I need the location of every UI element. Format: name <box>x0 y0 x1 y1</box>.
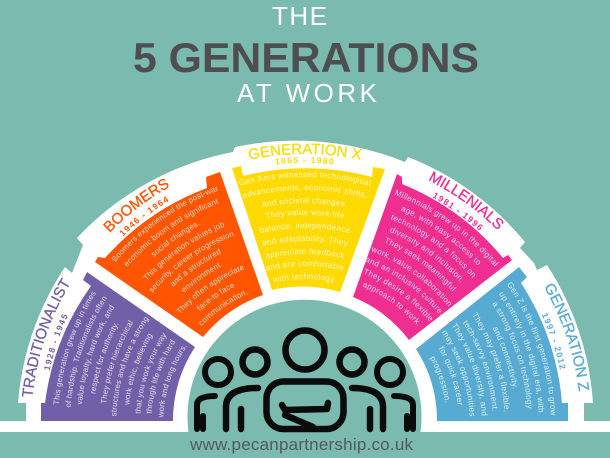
icon: inner right person <box>340 350 383 429</box>
title line: the: THE <box>272 1 327 31</box>
website footer: www.pecanpartnership.co.uk <box>189 435 414 454</box>
generation x heading and text: and societal changes. <box>262 197 346 207</box>
millenials heading and text: MILLENIALS <box>428 171 504 229</box>
generation x heading and text: 1965 - 1980 <box>275 157 334 165</box>
millenials heading and text: and an inclusive culture. <box>362 250 450 319</box>
millenials heading and text: work, value collaboration <box>367 239 458 310</box>
traditionalist heading and text <box>22 278 187 418</box>
boomers heading: 1946 - 1964 <box>120 196 168 236</box>
traditionalist heading and text: This generation grew up in times <box>53 292 96 404</box>
generation z heading and text: may seek opportunities <box>439 326 483 419</box>
boomers text: social changes. <box>152 223 200 256</box>
traditionalist heading and text: TRADITIONALIST <box>22 278 70 397</box>
millenials heading and text <box>362 171 504 326</box>
generation z heading and text: up entirely in the digital era, with <box>496 287 554 415</box>
generation x heading and text: GENERATION X <box>248 144 362 160</box>
generation x heading and text: and are comfortable <box>266 260 344 270</box>
millenials heading and text: age, with easy access to <box>401 207 480 265</box>
title <box>133 1 479 108</box>
boomers wedge <box>95 172 263 337</box>
traditionalist heading and text: work and long hours. <box>159 346 187 418</box>
boomers text: Boomers experienced the post-war <box>112 186 218 262</box>
traditionalist heading and text: of hardship. Traditionalists often <box>66 296 107 408</box>
millenials wedge <box>353 174 512 340</box>
panel: millenials <box>353 171 512 340</box>
millenials heading and text: They seek meaningful <box>382 232 461 294</box>
generation x heading and text: Gen Xers witnessed technological <box>239 171 372 186</box>
generation x heading and text: appreciate feedback <box>266 248 345 259</box>
generation x heading and text <box>239 144 372 283</box>
generation x heading and text: balance, independence <box>259 222 350 233</box>
generation z heading and text: progression. <box>428 354 454 405</box>
boomers text: This generation values job <box>143 222 224 280</box>
millenials heading and text: diversity and inclusion. <box>387 221 469 286</box>
icon: outer left person <box>197 359 231 429</box>
generation x heading and text: and adaptability. They <box>262 235 348 247</box>
millenials heading and text: They desire a flexible <box>360 263 439 325</box>
traditionalist heading and text: They prefer hierarchical <box>100 320 134 404</box>
traditionalist heading and text: 1928 - 1945 <box>44 314 68 370</box>
generation z heading and text: They may prefer a flexible, <box>470 309 518 415</box>
icon: group of five people <box>197 330 413 429</box>
boomers text: and a structured <box>171 248 221 286</box>
generation z heading and text <box>428 282 590 416</box>
icon: inner left person <box>226 350 268 429</box>
generation z heading and text: 1997 - 2012 <box>539 311 570 372</box>
boomers text: face-to face <box>196 284 234 311</box>
panel: generation x <box>232 144 385 292</box>
boomers text: economic boom and significant <box>124 198 219 266</box>
panel: boomers <box>95 172 263 337</box>
title line: at work: AT WORK <box>237 78 378 108</box>
traditionalist heading and text: through life with hard <box>146 339 176 414</box>
white semicircular backing with label bands <box>0 141 610 432</box>
generation z heading and text: and connectivity. <box>490 324 522 391</box>
millenials heading and text: approach to work. <box>360 276 426 329</box>
boomers text: communication. <box>199 292 248 326</box>
boomers text <box>112 186 248 326</box>
boomers text: security, career progression <box>150 232 234 292</box>
generation z heading and text: GENERATION Z <box>539 279 597 395</box>
traditionalist wedge <box>41 272 195 421</box>
generation x heading and text: advancements, economic shifts, <box>242 185 366 199</box>
traditionalist heading and text: value loyalty, hard work, and <box>77 304 114 404</box>
panel: traditionalist <box>22 272 195 421</box>
generation z heading and text: for quick career <box>436 344 468 408</box>
generation z heading and text: a strong focus on technology <box>490 298 542 412</box>
boomers heading: BOOMERS <box>103 178 169 232</box>
central teal semicircle <box>188 300 422 432</box>
title line: 5 generations: 5 GENERATIONS <box>133 34 479 81</box>
icon: outer right person <box>377 359 413 429</box>
traditionalist heading and text: respect for authority. <box>91 323 118 394</box>
boomers text: environment. <box>182 263 222 292</box>
traditionalist heading and text: that you work your way <box>134 332 167 414</box>
generation z heading and text: Gen Z is the first generation to grow <box>504 277 568 418</box>
millenials heading and text: Millennials grew up in the digital <box>394 190 499 266</box>
generation z wedge <box>416 267 568 421</box>
millenials heading and text: technology and a focus on <box>391 214 476 278</box>
generation z heading and text: tech-savvy environment. <box>460 317 505 414</box>
millenials heading and text: 1981 - 1996 <box>432 192 482 230</box>
boomers text: They often appreciate <box>176 266 244 313</box>
traditionalist heading and text: work ethic, believing <box>125 334 153 405</box>
generation z heading and text: They value diversity, and <box>449 319 495 419</box>
generation x heading and text: with technology. <box>273 273 336 283</box>
generation x heading and text: They value work-life <box>265 209 344 218</box>
generation x wedge <box>232 166 385 292</box>
panel: generation z <box>416 267 590 421</box>
traditionalist heading and text: structures and have a strong <box>112 316 150 416</box>
icon: centre person <box>266 330 344 429</box>
